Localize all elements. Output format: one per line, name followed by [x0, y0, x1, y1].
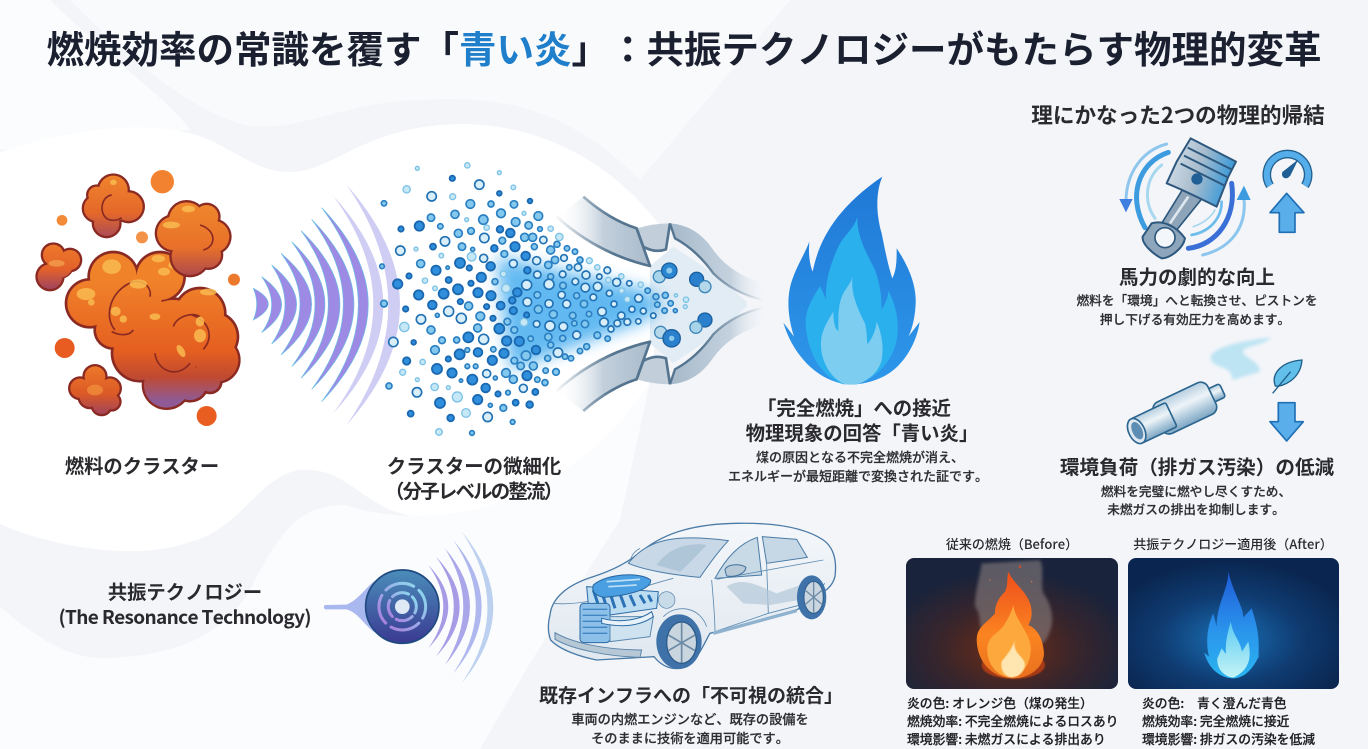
car body: [548, 523, 836, 669]
icon: large blue flame: [783, 177, 920, 384]
text: after list: [1142, 693, 1315, 748]
illustration: transparent car: [548, 523, 836, 669]
front wheel: [656, 614, 702, 669]
caption after: 共振テクノロジー適用後（After）: [1133, 534, 1333, 553]
text: environmental load: [1060, 451, 1335, 518]
particles: [55, 170, 240, 426]
icon: up arrow: [1270, 193, 1304, 232]
label: resonance technology: (The Resonance Technology): [58, 603, 312, 630]
large cloud: [65, 251, 241, 410]
illustration: nozzle: [497, 197, 763, 411]
icon: clean blue flame: [1204, 572, 1260, 678]
text: complete combustion: 物理現象の回答「青い炎」: [746, 417, 978, 446]
text: before list: 燃焼効率: 不完全燃焼によるロスあり: [907, 711, 1118, 730]
rear wheel: [797, 575, 826, 619]
icon: down arrow: [1270, 403, 1303, 441]
upper wall: [557, 197, 763, 300]
label: cluster refinement: [385, 450, 563, 504]
small clouds: [35, 173, 232, 416]
text: invisible integration: 車両の内燃エンジンなど、既存の設備を: [571, 709, 809, 728]
text: complete combustion: 煤の原因となる不完全燃焼が消え、: [756, 447, 964, 466]
mirror: [725, 565, 746, 576]
icon: orange flame with smoke: [975, 560, 1052, 679]
label: cluster refinement: （分子レベルの整流）: [385, 475, 563, 504]
glow: [497, 257, 663, 370]
illustration: atomised particles: [380, 163, 712, 435]
text: after list: 炎の色: 青く澄んだ青色: [1142, 693, 1287, 712]
text: complete combustion: [728, 392, 988, 485]
text: after list: 環境影響: 排ガスの汚染を低減: [1142, 729, 1315, 748]
text: horsepower: 馬力の劇的な向上: [1119, 261, 1275, 290]
label: resonance technology: 共振テクノロジー: [108, 577, 262, 605]
refined molecules: [653, 263, 712, 347]
engine: [580, 575, 675, 643]
text: environmental load: 燃料を完璧に燃やし尽くすため、: [1101, 481, 1291, 500]
text: horsepower: 燃料を「環境」へと転換させ、ピストンを: [1076, 290, 1318, 309]
text: before list: 環境影響: 未燃ガスによる排出あり: [907, 729, 1106, 748]
lower wall: [557, 308, 763, 411]
text: invisible integration: [539, 681, 843, 747]
text: horsepower: 押し下げる有効圧力を高めます。: [1100, 309, 1290, 328]
text: before list: 炎の色: オレンジ色（煤の発生）: [907, 693, 1093, 712]
label: fuel clusters: 燃料のクラスター: [65, 451, 219, 479]
title: 燃焼効率の常識を覆す「青い炎」：共振テクノロジーがもたらす物理的変革: [46, 19, 1322, 74]
icon: exhaust pipe: [1122, 337, 1272, 450]
connecting rod: [1143, 188, 1202, 258]
windows: [628, 537, 807, 578]
text: complete combustion: エネルギーが最短距離で変換された証です。: [728, 466, 988, 485]
text: after list: 燃焼効率: 完全燃焼に接近: [1142, 711, 1290, 730]
text: before list: [907, 693, 1118, 748]
piston head: [1167, 138, 1236, 207]
bumper: [555, 633, 642, 657]
icon: speedometer: [1267, 154, 1308, 186]
text: environmental load: 環境負荷（排ガス汚染）の低減: [1060, 451, 1335, 480]
text: invisible integration: 既存インフラへの「不可視の統合」: [539, 681, 843, 708]
illustration: sound waves: [253, 185, 400, 425]
heading: two physical consequences: 理にかなった2つの物理的帰結: [1031, 99, 1325, 130]
caption before: 従来の燃焼（Before）: [946, 534, 1078, 553]
label: cluster refinement: クラスターの微細化: [387, 450, 561, 479]
text: invisible integration: そのままに技術を適用可能です。: [591, 728, 789, 747]
icon: resonator disk: [324, 532, 493, 683]
panel: before: [906, 534, 1118, 689]
illustration: fuel cluster: [35, 170, 241, 426]
icon: leaf: [1273, 360, 1302, 393]
label: resonance technology: [58, 577, 312, 630]
icon: piston with rotation arrows: [1119, 138, 1251, 258]
panel: after: [1128, 534, 1339, 689]
text: complete combustion: 「完全燃焼」への接近: [757, 392, 951, 421]
text: horsepower: [1076, 261, 1318, 328]
text: environmental load: 未燃ガスの排出を抑制します。: [1107, 499, 1285, 518]
